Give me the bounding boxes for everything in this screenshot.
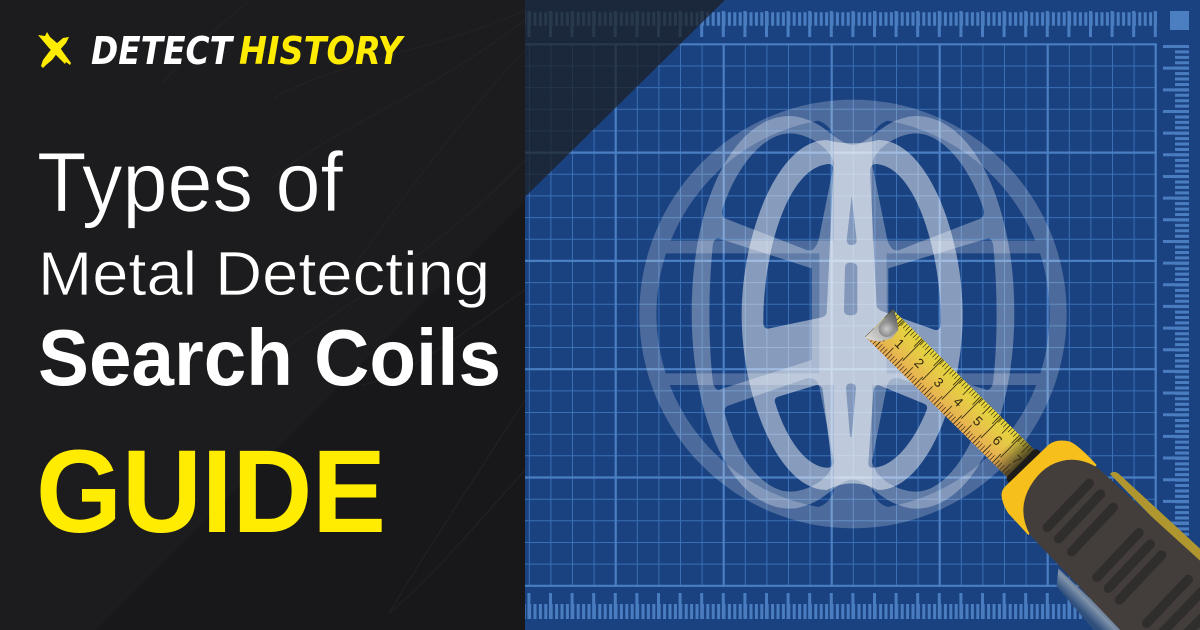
- top ruler: [525, 19, 1157, 24]
- grip ridges: [1047, 483, 1200, 630]
- tape numbers: 2: [911, 355, 927, 371]
- logo: wordmark: HISTORY: [239, 29, 405, 73]
- diagram: search coil outline: [639, 100, 1067, 528]
- blueprint minor grid: [525, 44, 1157, 587]
- coil layer: middle ring with spokes: [692, 116, 1014, 509]
- coil layer: outer ring: [639, 100, 1067, 528]
- coil layer: inner ring and spine: [742, 140, 963, 490]
- logo: wordmark: DETECT: [91, 29, 235, 73]
- title: Metal Detecting: Metal Detecting: [38, 240, 490, 309]
- bottom ruler: [525, 606, 1157, 612]
- tape tick marks: [868, 309, 1035, 475]
- steel tape end: [1057, 568, 1127, 630]
- title: Types of: Types of: [37, 135, 344, 229]
- tape numbers: [892, 336, 1025, 468]
- yellow housing: [1002, 441, 1097, 535]
- title: Search Coils: Search Coils: [38, 313, 501, 402]
- tape numbers: 5: [970, 413, 986, 429]
- right ruler: [1176, 45, 1182, 590]
- icon: tape measure: [863, 307, 1200, 630]
- title: GUIDE: GUIDE: [36, 426, 386, 558]
- dark grip body: [1023, 460, 1200, 630]
- corner square: [1170, 11, 1189, 30]
- tape numbers: 3: [931, 374, 947, 390]
- panel: dark title panel: [0, 0, 526, 630]
- blueprint major grid: [525, 44, 1157, 587]
- tape blade: [863, 307, 1045, 488]
- tape numbers: 6: [990, 433, 1005, 449]
- logo: brush X mark: [38, 32, 71, 68]
- logo: wordmark: [91, 29, 405, 73]
- tape numbers: 1: [892, 336, 907, 352]
- tape numbers: 7: [1009, 452, 1025, 468]
- metal hook: [865, 309, 898, 342]
- tape numbers: 4: [950, 394, 967, 410]
- gold side strip: [1110, 472, 1200, 570]
- panel: blueprint background: [525, 0, 1200, 630]
- overlay: dark corner triangle: [525, 0, 725, 197]
